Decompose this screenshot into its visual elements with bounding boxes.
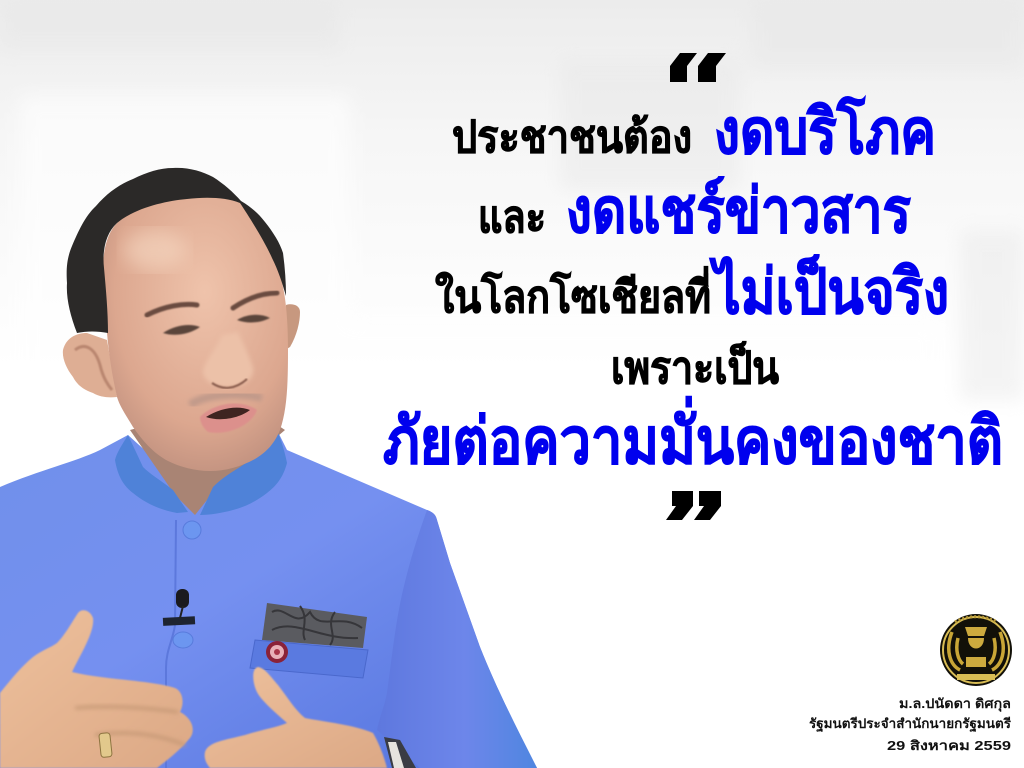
left hand — [0, 610, 193, 768]
date: 29 สิงหาคม 2559 — [887, 738, 1011, 753]
line 1: งดบริโภค — [714, 95, 936, 167]
moustache shading — [190, 395, 262, 405]
jacket button lower — [173, 632, 193, 648]
line 2: งดแชร์ข่าวสาร — [566, 176, 911, 246]
right hand — [205, 667, 387, 768]
neck — [130, 400, 285, 515]
nose base — [212, 379, 247, 388]
line 3 — [435, 254, 949, 327]
nose — [203, 332, 253, 387]
pocket flap — [250, 640, 368, 678]
speaker portrait — [0, 168, 537, 768]
jacket body — [0, 430, 537, 768]
jacket placket shading — [166, 520, 176, 768]
pocket square — [262, 603, 367, 648]
mouth — [200, 404, 257, 433]
pin badge — [266, 641, 288, 663]
forehead highlight — [123, 230, 187, 270]
closing quotation mark — [666, 491, 721, 520]
line 1 — [452, 95, 936, 167]
eyes — [163, 315, 270, 335]
line 1: ประชาชนต้อง — [452, 113, 692, 162]
lapel microphone — [163, 589, 195, 626]
right ear — [285, 304, 300, 350]
line 3: ไม่เป็นจริง — [709, 254, 949, 327]
hair — [67, 168, 286, 333]
collar left — [115, 435, 188, 513]
left hand finger lines — [75, 707, 185, 745]
jacket sleeve — [377, 510, 537, 768]
line 3: ในโลกโซเชียลที่ — [435, 266, 711, 322]
face — [103, 196, 288, 471]
collar right — [200, 430, 287, 515]
left ear — [63, 333, 117, 397]
line 2 — [478, 176, 911, 246]
eyebrows — [147, 293, 277, 315]
position: รัฐมนตรีประจำสำนักนายกรัฐมนตรี — [809, 716, 1011, 733]
wedding ring — [99, 733, 112, 758]
quote text — [383, 95, 1003, 477]
line 4: เพราะเป็น — [611, 341, 779, 393]
name: ม.ล.ปนัดดา ดิศกุล — [899, 696, 1011, 712]
watch — [384, 737, 416, 768]
signature block — [809, 696, 1011, 753]
icon: government seal — [940, 614, 1012, 686]
jacket button top — [183, 521, 201, 539]
left ear inner shading — [75, 346, 112, 390]
line 2: และ — [478, 193, 546, 242]
opening quotation mark — [670, 53, 726, 82]
